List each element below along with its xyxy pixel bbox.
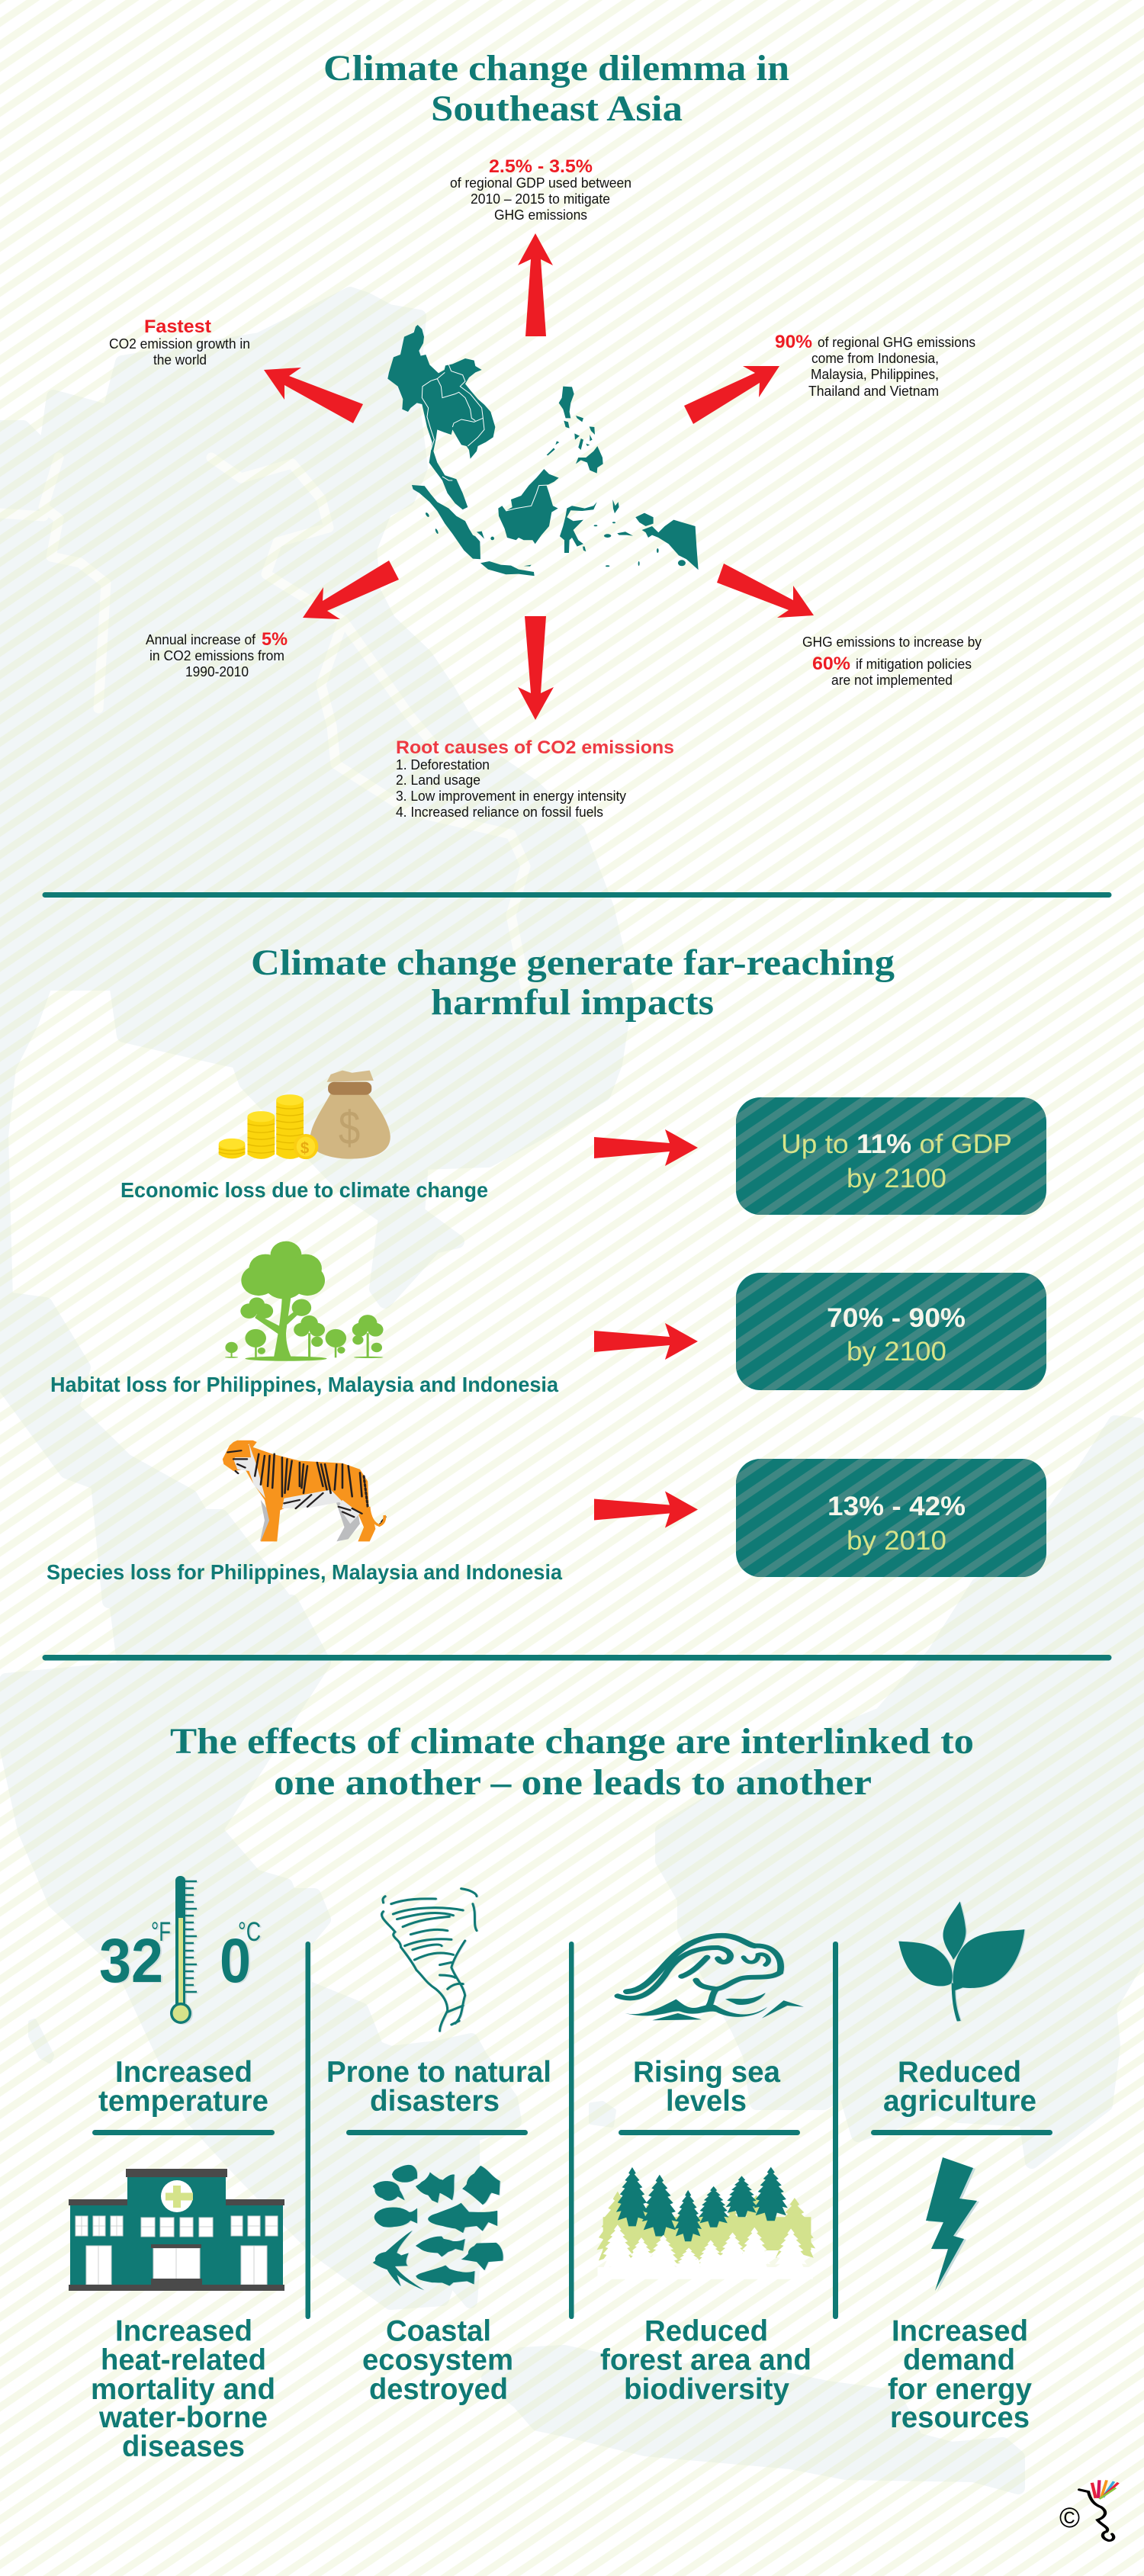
text: increased demand for energy: Increased — [892, 2315, 1028, 2347]
heading: harmful impacts — [251, 943, 895, 1023]
callout: emissions to increase: 60% — [812, 654, 850, 674]
callout: 90 percent of emissions: of regional GHG emissions — [818, 335, 975, 350]
value box: habitat loss: by 2100 — [847, 1336, 946, 1367]
text: reduced forest area — [600, 2315, 811, 2406]
title: Climate change dilemma in — [323, 48, 789, 88]
label: habitat loss: Habitat loss for Philippines, Malaysia and Indonesia — [50, 1373, 558, 1396]
callout: GDP mitigation: GHG emissions — [494, 207, 587, 223]
icon: trees — [225, 1241, 384, 1361]
heading: harmful impacts: Climate change generate far-reaching — [251, 943, 895, 983]
callout: emissions to increase: if mitigation policies — [856, 657, 972, 672]
text: prone to natural disasters: disasters — [370, 2085, 500, 2118]
value box: economic loss: by 2100 — [847, 1163, 946, 1193]
value box: habitat loss — [736, 1273, 1046, 1390]
callout: GDP mitigation: of regional GDP used between — [450, 175, 631, 191]
text: rising sea levels: levels — [666, 2085, 747, 2118]
callout: 90 percent of emissions: Thailand and Vietnam — [808, 384, 939, 399]
icon: thermometer: °F — [151, 1917, 171, 1947]
text: prone to natural disasters: Prone to natural — [326, 2056, 551, 2089]
value box: economic loss — [736, 1097, 1046, 1215]
callout: 90 percent of emissions: come from Indonesia, — [811, 351, 939, 366]
heading: interlinked effects: one another – one leads to another — [274, 1762, 872, 1803]
icon: fish — [373, 2165, 503, 2290]
callout: 90 percent of emissions: 90% — [775, 332, 812, 352]
value box: species loss: 13% - 42% — [827, 1491, 966, 1521]
text: increased temperature — [98, 2056, 268, 2118]
heading: harmful impacts: harmful impacts — [431, 982, 714, 1023]
label: species loss: Species loss for Philippines, Malaysia and Indonesia — [47, 1560, 562, 1584]
callout: annual increase: in CO2 emissions from — [149, 648, 284, 663]
callout: emissions to increase — [802, 634, 982, 688]
label: economic loss: Economic loss due to climate change — [121, 1178, 488, 1202]
title — [323, 48, 789, 129]
text: coastal ecosystem: Coastal — [386, 2315, 491, 2347]
callout: fastest growth: CO2 emission growth in — [109, 336, 250, 352]
arrow: economic loss — [594, 1129, 698, 1166]
value box: species loss: by 2010 — [847, 1525, 946, 1556]
text: increased demand for energy — [888, 2315, 1033, 2434]
callout: root causes — [396, 737, 674, 820]
text: heat-related mortality — [91, 2315, 275, 2463]
heading: interlinked effects: The effects of climate change are interlinked to — [170, 1721, 974, 1762]
text: reduced forest area: Reduced — [644, 2315, 768, 2347]
callout: annual increase: 5% — [262, 629, 288, 650]
arrow: lower right — [717, 564, 814, 618]
icon: tiger — [223, 1441, 385, 1541]
arrow: habitat loss — [594, 1323, 698, 1360]
callout: GDP mitigation: 2010 – 2015 to mitigate — [471, 191, 610, 207]
callout: GDP mitigation — [450, 156, 631, 223]
logo: copyright bird — [1059, 2480, 1118, 2541]
icon: lightning bolt — [926, 2157, 977, 2291]
arrow: upper left — [264, 368, 363, 423]
callout: root causes: 4. Increased reliance on fossil fuels — [396, 805, 603, 820]
text: reduced agriculture: agriculture — [883, 2085, 1036, 2118]
text: coastal ecosystem: ecosystem — [362, 2344, 513, 2376]
callout: emissions to increase: are not implemented — [831, 673, 953, 688]
text: reduced agriculture: Reduced — [898, 2056, 1021, 2089]
callout: annual increase — [146, 629, 288, 679]
callout: fastest growth: the world — [153, 352, 207, 368]
text: increased temperature: temperature — [98, 2085, 268, 2118]
callout: annual increase: Annual increase of — [146, 632, 256, 647]
icon: coins and money bag — [219, 1071, 390, 1159]
callout: 90 percent of emissions — [775, 332, 975, 399]
callout: root causes: 1. Deforestation — [396, 757, 490, 772]
icon: thermometer: 32 — [99, 1926, 163, 1996]
callout: annual increase: 1990-2010 — [185, 664, 249, 679]
arrow: down — [518, 616, 554, 720]
value box: habitat loss: 70% - 90% — [827, 1302, 966, 1333]
arrow: lower left — [303, 560, 399, 619]
icon: coins and money bag: $ — [339, 1102, 360, 1155]
text: prone to natural disasters — [326, 2056, 551, 2118]
callout: root causes: 2. Land usage — [396, 772, 480, 788]
callout: emissions to increase: GHG emissions to increase by — [802, 634, 982, 650]
icon: tornado — [381, 1889, 477, 2031]
callout: fastest growth — [109, 316, 250, 368]
text: increased temperature: Increased — [115, 2056, 252, 2089]
value box: economic loss: Up to 11% of GDP — [781, 1129, 1012, 1159]
title: Southeast Asia — [431, 88, 683, 129]
text: heat-related mortality: diseases — [122, 2430, 245, 2463]
icon: leaf — [898, 1901, 1024, 2022]
callout: GDP mitigation: 2.5% - 3.5% — [489, 156, 593, 177]
arrow: upper right — [684, 366, 779, 424]
icon: thermometer: 0 — [220, 1926, 251, 1996]
text: coastal ecosystem: destroyed — [369, 2373, 508, 2406]
text: coastal ecosystem — [362, 2315, 513, 2406]
icon: thermometer: °C — [238, 1917, 261, 1947]
text: reduced agriculture — [883, 2056, 1036, 2118]
text: increased demand for energy: demand — [903, 2344, 1015, 2376]
text: rising sea levels — [633, 2056, 781, 2118]
text: increased demand for energy: resources — [890, 2401, 1030, 2434]
icon: thermometer — [99, 1876, 261, 2024]
text: heat-related mortality: water-borne — [98, 2401, 268, 2434]
text: heat-related mortality: heat-related — [101, 2344, 266, 2376]
map: Southeast Asia — [387, 325, 699, 576]
icon: forest — [596, 2167, 815, 2279]
callout: fastest growth: Fastest — [144, 316, 211, 337]
icon: wave — [618, 1935, 804, 2020]
text: reduced forest area: forest area and — [600, 2344, 811, 2376]
arrow: up — [518, 233, 553, 336]
text: rising sea levels: Rising sea — [633, 2056, 781, 2089]
value box: species loss — [736, 1459, 1046, 1577]
text: reduced forest area: biodiversity — [624, 2373, 790, 2406]
logo: copyright bird: © — [1059, 2502, 1080, 2533]
icon: hospital — [69, 2169, 284, 2291]
icon: coins and money bag: $ — [300, 1139, 310, 1158]
callout: root causes: 3. Low improvement in energy intensity — [396, 789, 626, 804]
text: heat-related mortality: Increased — [115, 2315, 252, 2347]
text: heat-related mortality: mortality and — [91, 2373, 275, 2406]
text: increased demand for energy: for energy — [888, 2373, 1033, 2406]
callout: 90 percent of emissions: Malaysia, Philippines, — [811, 367, 939, 382]
callout: root causes: Root causes of CO2 emissions — [396, 737, 674, 758]
heading: interlinked effects — [170, 1721, 974, 1803]
arrow: species loss — [594, 1492, 698, 1528]
